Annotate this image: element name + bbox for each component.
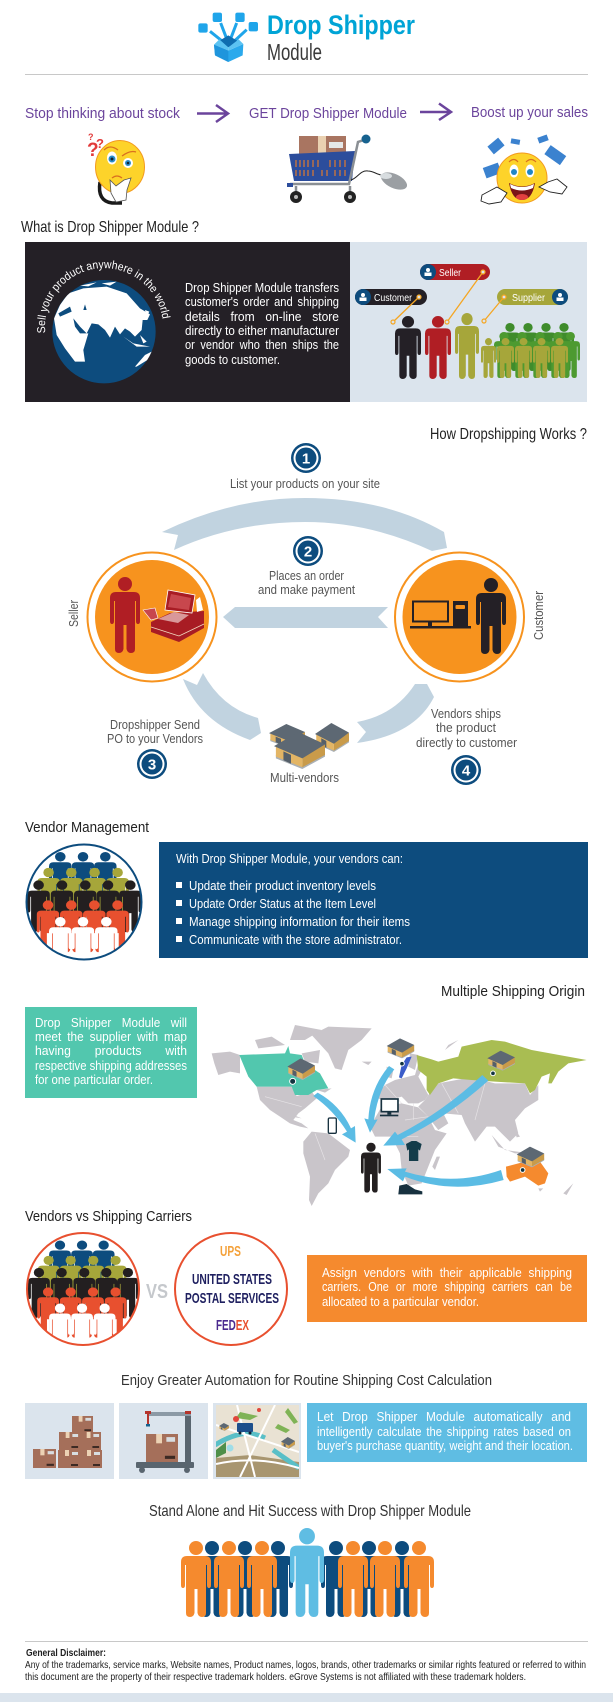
carriers circle: FEDEX: [216, 1317, 249, 1334]
pill: customer: Customer: [374, 293, 413, 304]
label: seller: Seller: [66, 599, 81, 627]
arrow: list to seller: [162, 498, 447, 551]
callout: map description: Drop Shipper Module will: [35, 1015, 187, 1030]
heading: vendor management: Vendor Management: [25, 819, 150, 836]
step 3 label: Dropshipper Send: [110, 717, 200, 732]
label: customer: Customer: [531, 590, 546, 640]
diagram: dropshipping flow: [66, 443, 546, 785]
step badge 3: [137, 749, 167, 779]
icon: open box with flying cubes: [198, 13, 258, 62]
panel: vendor features: [159, 842, 588, 958]
callout: automation: Let Drop Shipper Module automatically and: [317, 1409, 571, 1424]
icon: shoe: [398, 1184, 422, 1194]
people roles: [355, 264, 580, 379]
callout: map description: respective shipping addresses: [35, 1058, 187, 1073]
arrow: seller to vendors: [183, 673, 261, 740]
icon: thinking face: ?: [87, 140, 99, 161]
callout: map description: for one particular order.: [35, 1072, 153, 1087]
step 2 label: [258, 568, 355, 597]
callout: carriers: allocated to a particular vendor.: [322, 1294, 479, 1309]
callout: carriers: Assign vendors with their applicable shipping: [322, 1265, 572, 1280]
region: australia: [506, 1162, 548, 1186]
step badge 1: 1: [302, 450, 310, 468]
seller circle: [88, 552, 216, 682]
description text: customer's order and shipping: [185, 294, 339, 309]
heading: what is: What is Drop Shipper Module ?: [21, 219, 199, 236]
callout: map description: [25, 1007, 197, 1098]
disclaimer: [25, 1647, 586, 1683]
callout: automation: buyer's purchase quantity, weight and their location.: [317, 1438, 573, 1453]
icon: monitor: [380, 1099, 398, 1116]
description text: goods to customer.: [185, 352, 280, 367]
step 1 label: List your products on your site: [230, 476, 380, 491]
world map with shipping arrows: [212, 1025, 587, 1206]
feature list: Communicate with the store administrator.: [189, 932, 402, 947]
buyer figure: [361, 1143, 381, 1193]
description text: [185, 280, 340, 367]
step 2 label: Places an order: [269, 568, 345, 583]
heading: automation: Enjoy Greater Automation for Routine Shipping Cost Calculation: [121, 1372, 492, 1389]
arrow: europe: [364, 1066, 394, 1133]
callout: map description: meet the supplier with map: [35, 1029, 187, 1044]
carriers circle: POSTAL SERVICES: [185, 1290, 279, 1307]
step badge 2: [293, 536, 323, 566]
heading: vendors vs carriers: Vendors vs Shipping Carriers: [25, 1208, 192, 1225]
callout: carriers: [307, 1255, 587, 1322]
icon: vendor crowd circle: [26, 844, 142, 969]
heading: multiple shipping origin: Multiple Shipping Origin: [441, 983, 585, 1000]
panel: what is drop shipper: [25, 242, 587, 402]
arrow 1: [197, 105, 228, 122]
step badge 1: [291, 443, 321, 473]
step 4 label: the product: [436, 720, 496, 735]
description text: or vendor who then ships the: [185, 337, 339, 352]
icon: phone: [328, 1118, 336, 1133]
globe: [52, 280, 156, 383]
tile: weighing scale: [119, 1403, 208, 1479]
heading: stand alone: Stand Alone and Hit Success with Drop Shipper Module: [149, 1503, 471, 1520]
vs label: VS: [146, 1281, 168, 1303]
step 4 label: Vendors ships: [431, 706, 501, 721]
arrow: australia: [387, 1168, 504, 1187]
region: sweden: [399, 1057, 412, 1078]
step 3 label: [107, 717, 203, 746]
callout: automation: intelligently calculate the shipping rates based on: [317, 1424, 571, 1439]
feature list: Update their product inventory levels: [189, 878, 376, 893]
warehouse pins: [287, 1038, 544, 1172]
icon: t-shirt: [406, 1141, 422, 1161]
panel intro: With Drop Shipper Module, your vendors can:: [176, 851, 403, 866]
carriers circle: [175, 1233, 287, 1345]
description text: directly to either manufacturer: [185, 323, 340, 338]
arrow 2: [420, 104, 451, 120]
pill: supplier: [497, 289, 568, 305]
arrow: asia: [383, 1075, 488, 1146]
icon: shopping cart with parcel and mouse: [287, 134, 410, 203]
arrow: customer to seller: [223, 607, 388, 628]
step badge 3: 3: [148, 756, 156, 774]
icon: thinking face: ?: [96, 136, 104, 151]
description text: details from on-line store: [185, 309, 339, 324]
pill: seller: [420, 264, 490, 280]
icon: warehouses: [269, 723, 349, 769]
step 4 label: [416, 706, 518, 750]
feature list: Manage shipping information for their items: [189, 914, 410, 929]
step text: boost sales: Boost up your sales: [471, 104, 588, 121]
step 2 label: and make payment: [258, 582, 355, 597]
callout: automation: [307, 1403, 587, 1462]
carriers circle: UPS: [220, 1243, 241, 1260]
tile: stacked boxes: [25, 1403, 114, 1479]
step text: get module: GET Drop Shipper Module: [249, 105, 407, 122]
icon: desktop computer: [410, 601, 471, 628]
icon: vendor crowd circle 2: [27, 1233, 139, 1354]
region: canada: [239, 1046, 328, 1095]
feature list: Update Order Status at the Item Level: [189, 896, 376, 911]
map land: [212, 1025, 573, 1206]
arrow: north america: [313, 1093, 356, 1143]
step badge 2: 2: [304, 544, 312, 560]
step badge 4: [451, 755, 481, 785]
arrow: vendors to customer: [357, 684, 434, 743]
description text: Drop Shipper Module transfers: [185, 280, 339, 295]
curved caption: Sell your product anywhere in the world: [37, 260, 171, 333]
callout: map description: having products with: [35, 1043, 187, 1058]
icon: thinking face: ?: [88, 132, 94, 142]
pill: supplier: Supplier: [512, 293, 546, 304]
carriers circle: UNITED STATES: [192, 1271, 272, 1288]
logo subtitle: Module: [267, 39, 322, 65]
step badge 4: 4: [462, 762, 471, 780]
label: multi-vendors: Multi-vendors: [270, 770, 339, 785]
step 3 label: PO to your Vendors: [107, 731, 203, 746]
pill: customer: [355, 289, 427, 305]
region: russia: [417, 1040, 587, 1095]
logo: Drop Shipper Module: [198, 10, 415, 65]
icon: happy face with money: [481, 134, 567, 204]
step text: stop thinking: Stop thinking about stock: [25, 105, 180, 122]
step 4 label: directly to customer: [416, 735, 518, 750]
logo wordmark: Drop Shipper: [267, 10, 415, 40]
tile: delivery map: [213, 1403, 301, 1479]
customer circle: [395, 552, 524, 682]
figures: crowd with leader: [181, 1528, 434, 1617]
icon: thinking face: [87, 132, 144, 203]
icon: cash register: [143, 590, 204, 642]
pill: seller: Seller: [439, 268, 462, 279]
feature list: [176, 878, 410, 947]
footer band: [0, 1693, 613, 1702]
disclaimer: General Disclaimer:: [26, 1647, 106, 1659]
